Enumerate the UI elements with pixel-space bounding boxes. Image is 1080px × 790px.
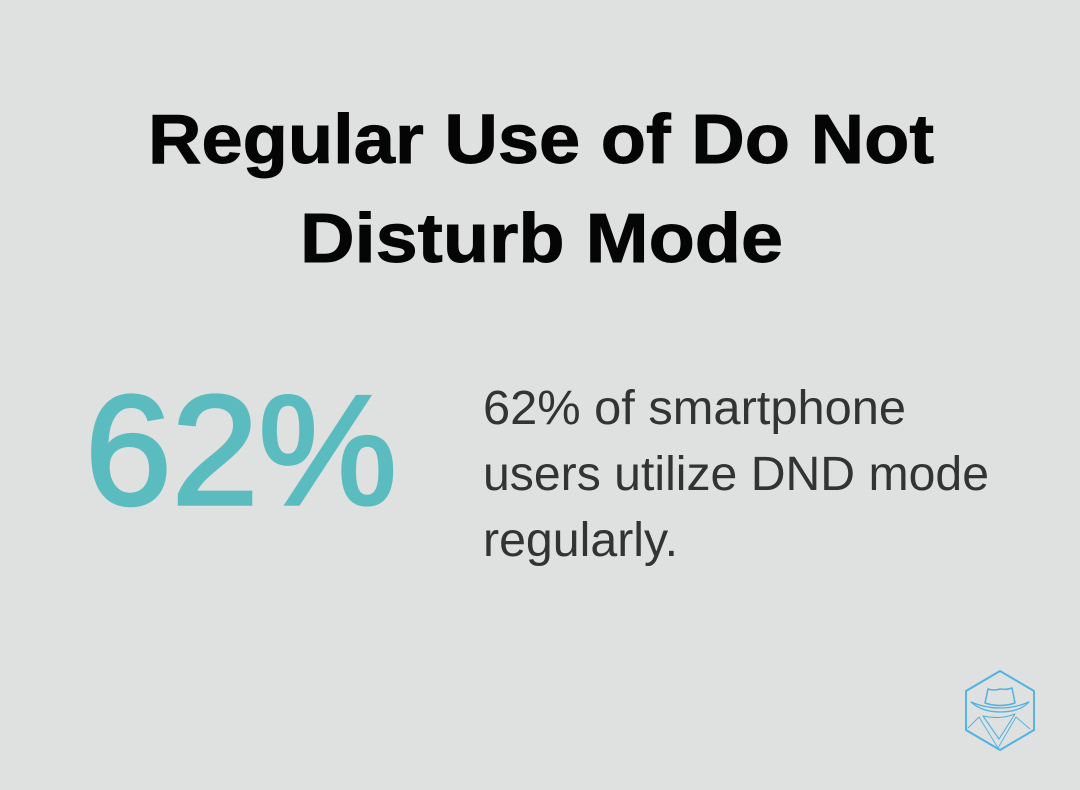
title — [148, 100, 934, 277]
description text: 62% of smartphone — [483, 382, 906, 435]
title: Regular Use of Do Not — [148, 100, 934, 178]
title: Disturb Mode — [300, 199, 783, 277]
description text: users utilize DND mode — [483, 448, 989, 501]
big statistic: 62%: 62% — [85, 364, 397, 538]
icon: hexagon logo with hat spy — [966, 671, 1034, 750]
description text: regularly. — [483, 514, 678, 567]
description text — [483, 382, 989, 567]
